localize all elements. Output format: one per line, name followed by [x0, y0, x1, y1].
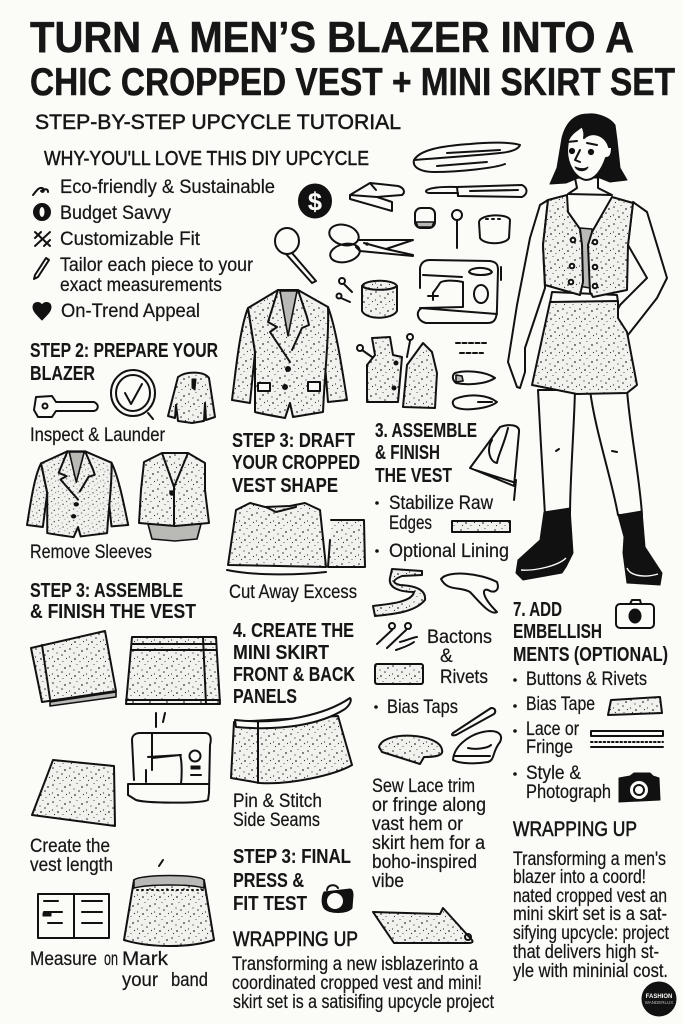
panel: wrapping up right — [513, 818, 670, 982]
icon: iron — [470, 425, 519, 500]
panel: why you'll love this: WHY-YOU'LL LOVE THIS DIY UPCYCLE — [44, 148, 369, 170]
panel: why you'll love this: Budget Savvy — [60, 203, 171, 224]
icon: big blazer — [232, 290, 347, 418]
icon: book — [38, 894, 109, 938]
panel: 3 assemble and finish: 3. ASSEMBLE — [375, 419, 477, 442]
panel: 3 assemble and finish — [372, 419, 519, 943]
panel: step 3 assemble left: your — [122, 970, 159, 991]
panel: 3 assemble and finish: Sew Lace trim — [372, 776, 475, 797]
panel: create mini skirt: 4. CREATE THE — [233, 619, 354, 642]
icon: fabric draft — [227, 503, 326, 574]
icon: dollar coin: $ — [308, 188, 322, 216]
logo badge: FASHION — [646, 994, 672, 1000]
icon: scissors — [327, 221, 413, 265]
neck — [568, 176, 612, 195]
legs — [538, 390, 642, 515]
panel: why you'll love this: Customizable Fit — [60, 229, 201, 250]
icon: coin — [34, 204, 50, 220]
panel: wrapping up middle — [232, 928, 495, 1013]
panel: add embellishments: 7. ADD — [513, 598, 562, 621]
panel: 3 assemble and finish: Edges — [389, 513, 432, 534]
panel: step 3 assemble left: STEP 3: ASSEMBLE — [30, 579, 183, 602]
icon: sewing machine — [418, 260, 501, 323]
panel: add embellishments: Bias Tape — [526, 694, 595, 715]
panel: add embellishments — [513, 598, 668, 803]
panel: step 3 assemble left — [30, 579, 220, 991]
illustration: woman wearing the set — [508, 114, 667, 585]
panel: step 3 draft: YOUR CROPPED — [232, 451, 360, 474]
panel: wrapping up middle: skirt set is a satisifing upcycle project — [233, 992, 495, 1013]
icon: camera — [322, 885, 353, 912]
icon: tape strip — [452, 708, 495, 735]
icon: excess fabric — [328, 520, 365, 567]
panel: 3 assemble and finish: or fringe along — [372, 795, 486, 816]
panel: step 3 assemble left: Measure — [30, 949, 97, 970]
panel: step 2 — [27, 339, 218, 563]
icon: pins — [336, 278, 352, 302]
icon: vest — [139, 453, 209, 541]
panel: add embellishments: Lace or — [526, 719, 580, 740]
icon: pencil — [34, 258, 49, 279]
panel: step 2: Inspect & Launder — [30, 425, 166, 446]
icon: lace fringe — [591, 731, 663, 747]
icon: seam tool — [34, 396, 98, 417]
vest — [543, 195, 583, 295]
camisole — [578, 228, 592, 288]
icon: fabric with lines — [126, 637, 220, 704]
panel: 3 assemble and finish: & FINISH — [375, 441, 440, 464]
icon: tape measure small — [415, 208, 435, 228]
panel: step 3 draft — [227, 429, 365, 603]
panel: wrapping up middle: coordinated cropped vest and mini! — [232, 973, 482, 994]
panel: wrapping up right: that delivers high st- — [513, 942, 659, 963]
panel: create mini skirt: FRONT & BACK — [233, 663, 355, 686]
icon: gathered skirt — [124, 860, 214, 946]
panel: 3 assemble and finish: Bactons — [427, 627, 492, 648]
panel: step 3 draft: Cut Away Excess — [229, 582, 357, 603]
panel: wrapping up right: WRAPPING UP — [513, 818, 637, 841]
icon: folded fabric — [31, 631, 116, 706]
skirt — [532, 301, 637, 394]
panel: step 2: Remove Sleeves — [30, 542, 152, 563]
panel: why you'll love this: Tailor each piece to your — [60, 255, 254, 276]
icon: lace rectangle — [375, 664, 423, 684]
icon: pin cushion — [479, 215, 510, 243]
panel: 3 assemble and finish: Stabilize Raw — [389, 493, 493, 514]
icon: black camera — [619, 773, 660, 802]
panel: add embellishments: Fringe — [526, 737, 573, 758]
panel: why you'll love this: On-Trend Appeal — [61, 301, 200, 322]
left boot — [516, 508, 573, 580]
icon: pin — [452, 210, 462, 248]
icon: bias tape — [608, 697, 662, 715]
icon: blazer — [27, 451, 128, 537]
panel: step 3 assemble left: Create the — [30, 836, 110, 857]
panel: why you'll love this: exact measurements — [60, 275, 222, 296]
panel: create mini skirt: Side Seams — [233, 810, 320, 831]
icon: small blazer — [168, 373, 215, 423]
panel: step 3 assemble left: on — [104, 949, 118, 970]
panel: 3 assemble and finish: Optional Lining — [389, 541, 509, 562]
panel: step 2: STEP 2: PREPARE YOUR — [30, 339, 218, 362]
icon: sewing machine — [128, 713, 211, 803]
panel: why you'll love this — [33, 148, 369, 322]
panel: step 3 draft: VEST SHAPE — [232, 474, 338, 497]
panel: add embellishments: Buttons & Rivets — [526, 669, 647, 690]
panel: add embellishments: Style & — [526, 763, 581, 784]
panel: 3 assemble and finish: vibe — [372, 871, 404, 892]
waist band — [550, 292, 618, 303]
panel: 3 assemble and finish: boho-inspired — [372, 852, 477, 873]
panel: 3 assemble and finish: Bias Taps — [387, 697, 458, 718]
panel: why you'll love this: Eco-friendly & Sustainable — [60, 177, 275, 198]
panel: final press: PRESS & — [233, 869, 304, 892]
panel: step 2: BLAZER — [30, 362, 95, 385]
icon: leaf squiggle — [33, 188, 48, 195]
panel: wrapping up middle: WRAPPING UP — [233, 928, 358, 951]
icon: tailor's tool — [275, 228, 316, 283]
icon: heart — [33, 303, 51, 320]
panel: 3 assemble and finish: Rivets — [440, 667, 488, 688]
panel: step 3 draft: STEP 3: DRAFT — [232, 429, 355, 452]
icon: chalk — [453, 371, 497, 409]
icon: tools — [35, 232, 50, 246]
face — [567, 126, 612, 180]
panel: create mini skirt: Pin & Stitch — [233, 791, 322, 812]
icon: measuring tape — [373, 569, 425, 616]
icon: magnifier check — [111, 370, 155, 419]
panel: create mini skirt: MINI SKIRT — [233, 641, 329, 664]
icon: folded fabric — [414, 143, 520, 172]
right boot — [618, 511, 662, 585]
panel: step 3 assemble left: band — [171, 970, 208, 991]
logo badge: WANDERLUX — [645, 1000, 673, 1005]
subtitle: STEP-BY-STEP UPCYCLE TUTORIAL — [35, 111, 401, 134]
icon: skirt panel — [231, 698, 352, 783]
panel: step 3 assemble left: & FINISH THE VEST — [30, 600, 196, 623]
panel: step 3 assemble left: Mark — [122, 949, 169, 970]
title — [30, 13, 675, 104]
panel: add embellishments: Photograph — [526, 782, 611, 803]
icon: pins — [377, 623, 417, 650]
icon: strip — [452, 521, 510, 532]
panel: wrapping up middle: Transforming a new isblazerinto a — [232, 954, 478, 975]
icon: buttons — [456, 343, 488, 353]
left arm — [508, 200, 548, 388]
icon: fabric piece — [32, 760, 115, 826]
icon: vest pieces — [357, 334, 437, 408]
icon: seam ripper — [426, 185, 526, 197]
logo badge — [642, 982, 676, 1016]
panel: 3 assemble and finish: vast hem or — [372, 814, 464, 835]
panel: final press: STEP 3: FINAL — [233, 845, 351, 868]
right arm — [603, 202, 667, 335]
panel: wrapping up right: blazer into a coord! — [513, 867, 646, 888]
icon: ribbon — [350, 183, 404, 211]
icon: dollar coin — [298, 184, 332, 218]
panel: 3 assemble and finish: THE VEST — [375, 464, 452, 487]
panel: add embellishments: EMBELLISH — [513, 620, 602, 643]
icon: small iron — [453, 731, 501, 763]
panel: 3 assemble and finish: skirt hem for a — [372, 833, 485, 854]
icon: tape roll — [379, 736, 442, 764]
title: TURN A MEN’S BLAZER INTO A — [30, 13, 634, 62]
panel: final press — [233, 845, 353, 915]
icon: camera outline — [616, 600, 654, 628]
icon: fabric sheet — [373, 908, 473, 943]
icon: spool — [362, 281, 397, 318]
panel: create mini skirt — [231, 619, 355, 831]
hair — [550, 114, 627, 184]
icon: tool shape — [441, 574, 498, 613]
panel: step 3 assemble left: vest length — [30, 855, 113, 876]
panel: 3 assemble and finish: & — [440, 646, 453, 667]
panel: create mini skirt: PANELS — [233, 685, 297, 708]
panel: final press: FIT TEST — [233, 892, 307, 915]
